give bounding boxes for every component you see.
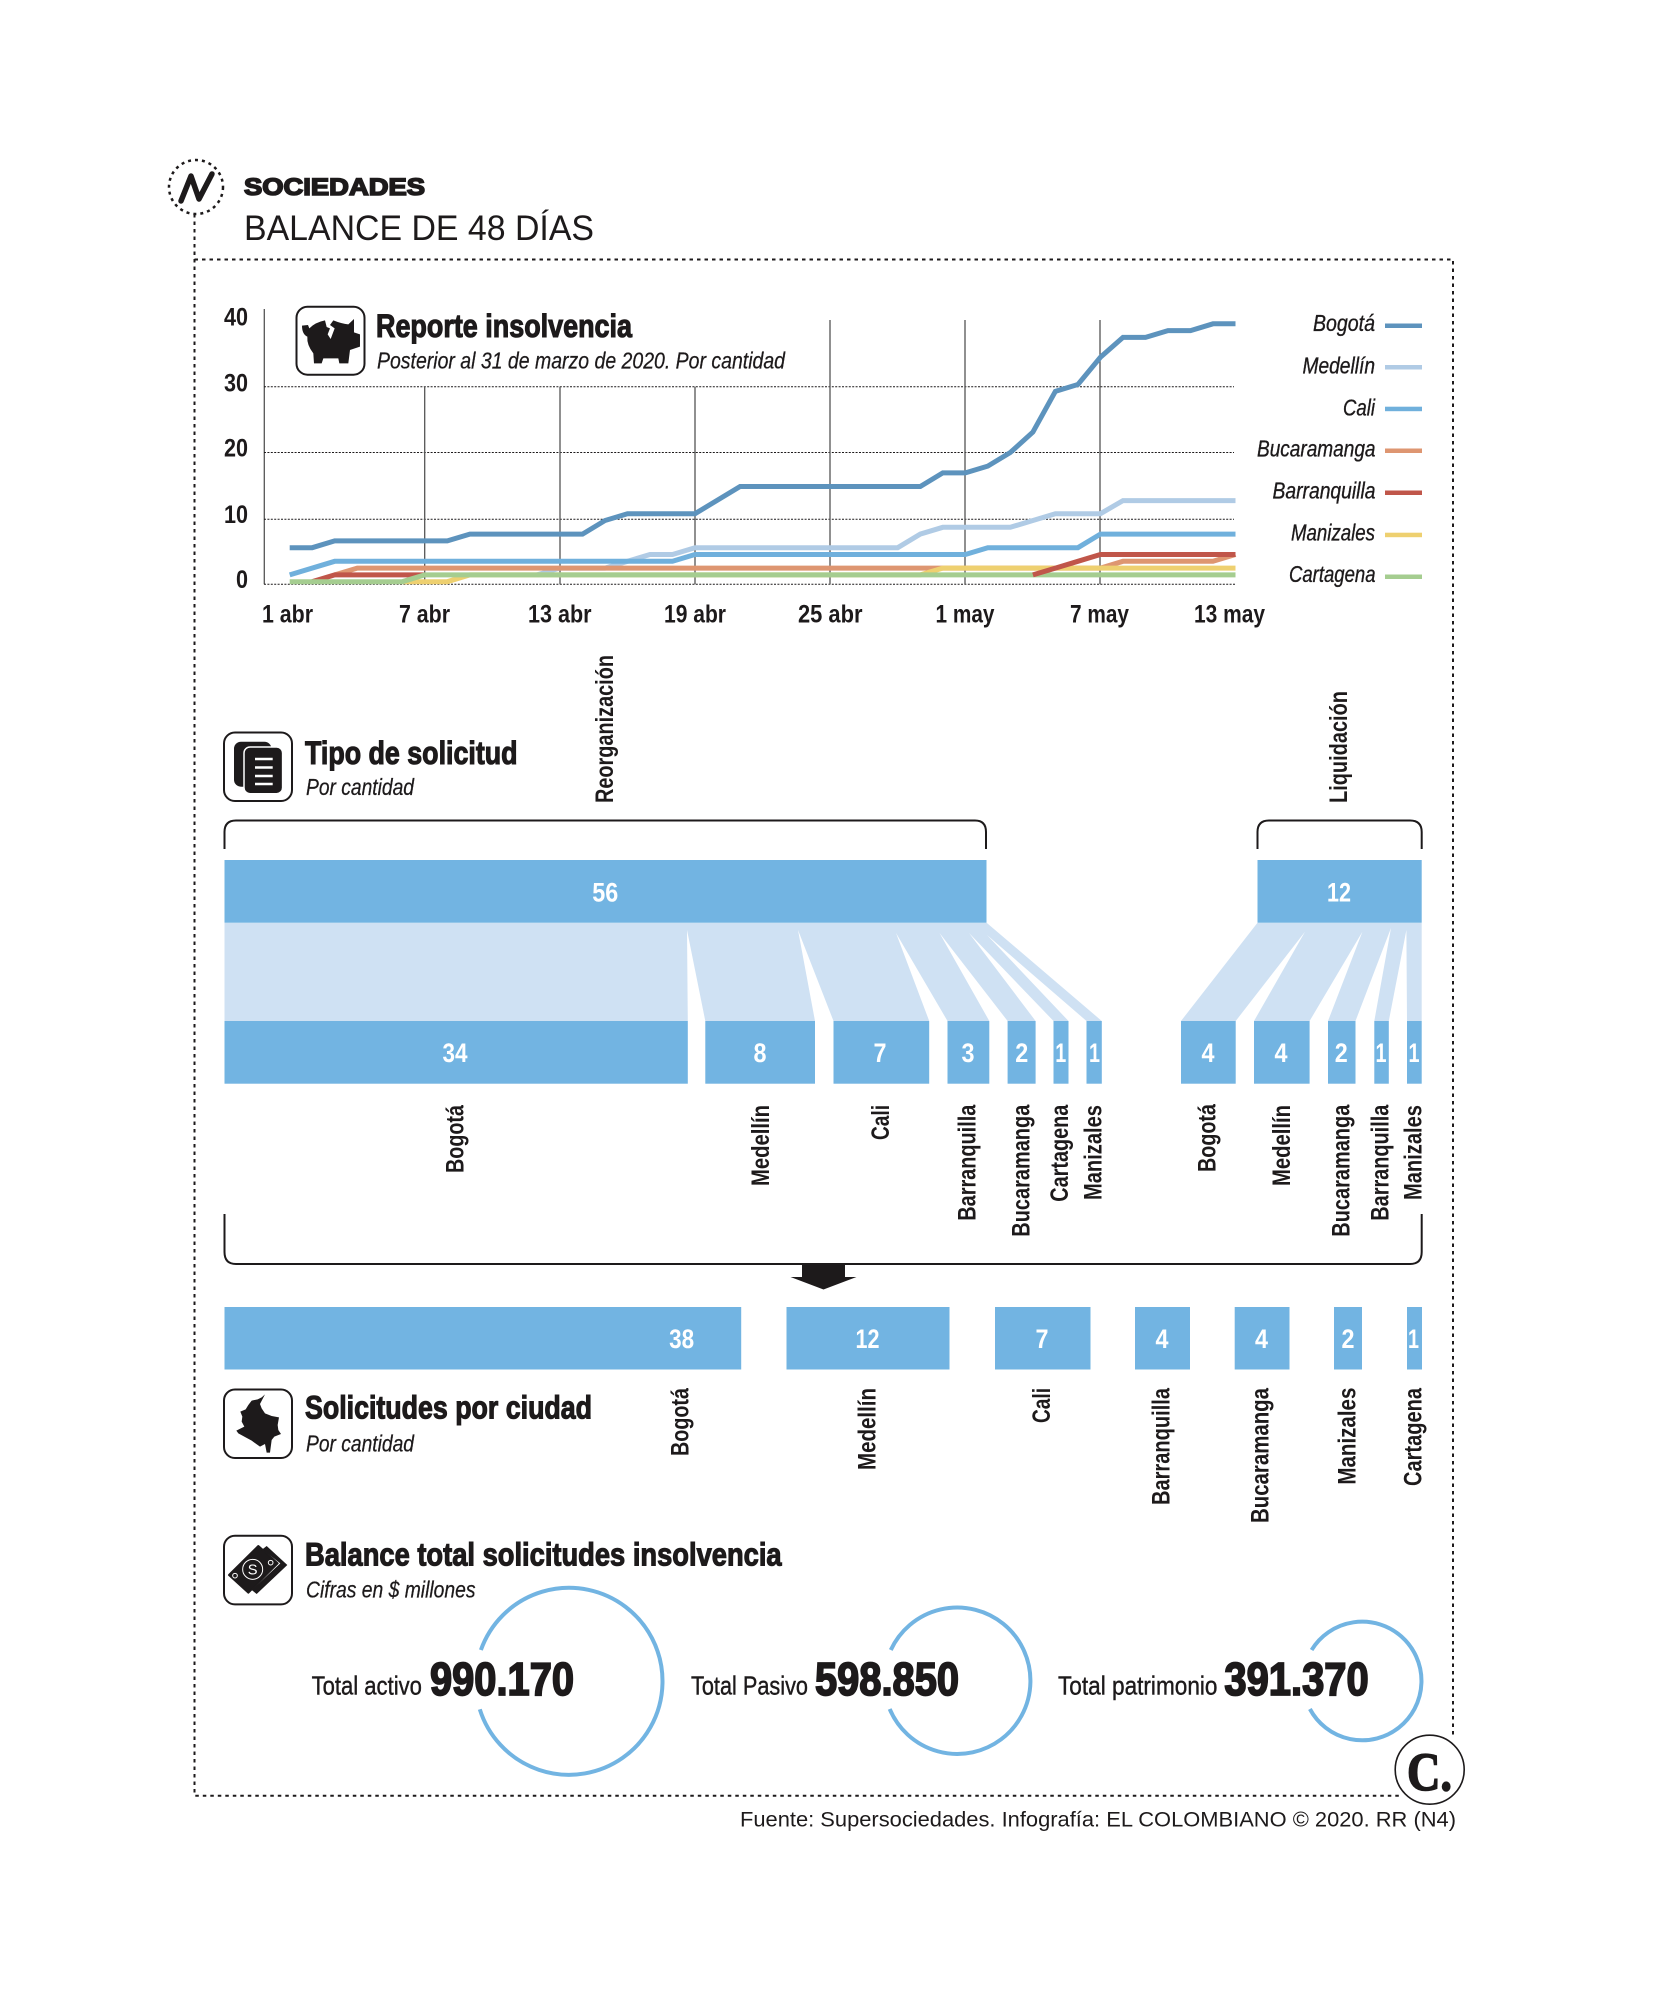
kicker: SOCIEDADES <box>244 174 425 201</box>
metric: total activo: 990.170 <box>430 1653 574 1705</box>
icon: N logo <box>169 160 223 214</box>
lower bars reorganización <box>224 1021 1102 1084</box>
legend: Medellín <box>1302 352 1375 378</box>
metric: total patrimonio <box>1058 1653 1369 1705</box>
chart title: Reporte insolvencia <box>376 308 632 344</box>
metric: total activo <box>312 1653 574 1705</box>
metric: total pasivo <box>691 1653 959 1705</box>
lower bars reorganización: 1 <box>1089 1038 1100 1068</box>
circle: total patrimonio <box>1310 1622 1421 1740</box>
flow: reorganización to cities <box>224 923 1102 1021</box>
lower bars liquidación: 1 <box>1408 1038 1420 1068</box>
y axis labels: 0 <box>236 566 248 594</box>
series: Medellín <box>537 501 1236 575</box>
source credit: Fuente: Supersociedades. Infografía: EL COLOMBIANO © 2020. RR (N4) <box>740 1809 1456 1832</box>
x axis labels: 19 abr <box>664 601 726 629</box>
legend: Manizales <box>1291 520 1375 546</box>
label: Reorganización: Reorganización <box>591 655 619 803</box>
lower bars reorganización: 2 <box>1015 1038 1028 1068</box>
series: Bucaramanga <box>335 554 1236 575</box>
y axis labels: 30 <box>224 370 248 398</box>
series: Barranquilla end <box>1033 554 1236 575</box>
panel: line chart reporte insolvencia <box>224 304 1422 629</box>
x axis labels: 7 abr <box>399 601 450 629</box>
panel: tipo de solicitud <box>224 655 1428 1290</box>
chart subtitle: Posterior al 31 de marzo de 2020. Por cantidad <box>377 348 786 374</box>
city labels <box>666 1387 1428 1523</box>
lower bars reorganización: 7 <box>874 1038 886 1068</box>
city labels <box>442 1104 1428 1237</box>
x axis labels: 13 abr <box>528 601 592 629</box>
y axis labels: 10 <box>224 501 248 529</box>
metric: total activo: Total activo <box>312 1670 422 1700</box>
city labels: Barranquilla <box>1148 1387 1176 1505</box>
legend: Barranquilla <box>1272 478 1376 504</box>
x axis labels: 13 may <box>1194 601 1265 629</box>
city labels: Cartagena <box>1046 1104 1074 1202</box>
lower bars reorganización: 34 <box>442 1038 468 1068</box>
circle: total pasivo <box>890 1608 1030 1754</box>
icon: El Colombiano logo: C. <box>1407 1742 1452 1802</box>
bracket: reorganización <box>224 820 986 849</box>
city bars: 4 <box>1255 1324 1268 1354</box>
city labels: Cali <box>867 1105 895 1140</box>
city bars: 4 <box>1156 1324 1168 1354</box>
section title: Tipo de solicitud <box>305 735 518 771</box>
y axis labels <box>224 304 248 594</box>
legend: Bucaramanga <box>1257 436 1376 462</box>
city bars: 1 <box>1408 1324 1419 1354</box>
header <box>244 174 594 248</box>
section subtitle: Por cantidad <box>306 1431 415 1457</box>
lower bars liquidación <box>1181 1021 1422 1084</box>
bar: 12: 12 <box>1327 878 1351 908</box>
city labels: Bogotá <box>442 1105 470 1173</box>
metric: total pasivo: Total Pasivo <box>691 1670 808 1700</box>
series: Manizales <box>402 568 1236 582</box>
bracket: sum of cities <box>224 1214 1422 1264</box>
x axis labels <box>262 601 1265 629</box>
city labels: Cartagena <box>1400 1387 1428 1486</box>
lower bars liquidación: 4 <box>1202 1038 1214 1068</box>
lower bars reorganización: 8 <box>754 1038 766 1068</box>
legend: Cali <box>1343 394 1376 420</box>
lower bars liquidación: 4 <box>1274 1038 1288 1068</box>
dotted frame <box>194 214 1453 1796</box>
panel: balance total <box>224 1536 1421 1775</box>
bracket: liquidación <box>1258 820 1422 849</box>
city bars <box>224 1307 1422 1370</box>
metric: total pasivo: 598.850 <box>815 1653 959 1705</box>
lower bars reorganización: 3 <box>962 1038 974 1068</box>
city bars: 12 <box>856 1324 880 1354</box>
city bars: 38 <box>669 1324 694 1354</box>
arrow: down <box>790 1264 856 1290</box>
city labels: Bogotá <box>666 1388 694 1456</box>
metric: total patrimonio: Total patrimonio <box>1058 1670 1218 1700</box>
lower bars reorganización: 1 <box>1055 1038 1066 1068</box>
panel: solicitudes por ciudad <box>224 1307 1428 1523</box>
city labels: Medellín <box>747 1105 775 1186</box>
section title: Solicitudes por ciudad <box>305 1389 592 1425</box>
y axis labels: 20 <box>224 434 248 462</box>
series: Cartagena <box>290 575 1236 582</box>
series: Cali <box>290 534 1236 575</box>
city labels: Barranquilla <box>1366 1104 1394 1221</box>
series: Barranquilla start <box>312 575 425 582</box>
legend: Cartagena <box>1289 561 1376 587</box>
city labels: Cali <box>1028 1388 1056 1423</box>
city labels: Manizales <box>1080 1105 1108 1200</box>
section subtitle: Cifras en $ millones <box>306 1576 476 1602</box>
section title: Balance total solicitudes insolvencia <box>305 1537 782 1573</box>
section subtitle: Por cantidad <box>306 774 415 800</box>
icon: Colombia map <box>224 1390 292 1458</box>
bar: 12 <box>1258 860 1422 923</box>
legend <box>1257 310 1422 587</box>
main title: BALANCE DE 48 DÍAS <box>244 209 594 248</box>
label: Liquidación: Liquidación <box>1325 691 1353 803</box>
icon: money bills: S <box>248 1563 258 1579</box>
x axis labels: 1 may <box>936 601 995 629</box>
series: Bogotá <box>290 324 1236 548</box>
city bars: 7 <box>1036 1324 1048 1354</box>
bar: 56 <box>224 860 986 923</box>
city labels: Medellín <box>1268 1105 1296 1186</box>
city labels: Manizales <box>1334 1388 1362 1485</box>
lower bars liquidación: 2 <box>1335 1038 1348 1068</box>
circle: total activo <box>480 1588 663 1775</box>
city labels: Bogotá <box>1194 1104 1222 1172</box>
lower bars liquidación: 1 <box>1376 1038 1386 1068</box>
icon: documents <box>224 732 292 801</box>
city labels: Manizales <box>1400 1105 1428 1200</box>
city labels: Bucaramanga <box>1246 1387 1274 1523</box>
city labels: Barranquilla <box>954 1104 982 1221</box>
x axis labels: 7 may <box>1070 601 1129 629</box>
legend: Bogotá <box>1313 310 1375 336</box>
city labels: Bucaramanga <box>1328 1104 1356 1237</box>
city labels: Bucaramanga <box>1008 1104 1036 1237</box>
x axis labels: 1 abr <box>262 601 313 629</box>
metric: total patrimonio: 391.370 <box>1224 1653 1369 1705</box>
x axis labels: 25 abr <box>798 601 863 629</box>
icon: money bills <box>224 1536 292 1604</box>
bar: 56: 56 <box>592 878 618 908</box>
flow: liquidación to cities <box>1181 923 1422 1021</box>
city labels: Medellín <box>854 1388 882 1470</box>
city bars: 2 <box>1342 1324 1354 1354</box>
y axis labels: 40 <box>224 304 248 332</box>
icon: El Colombiano logo <box>1395 1735 1464 1804</box>
icon: piggy bank <box>296 307 364 375</box>
